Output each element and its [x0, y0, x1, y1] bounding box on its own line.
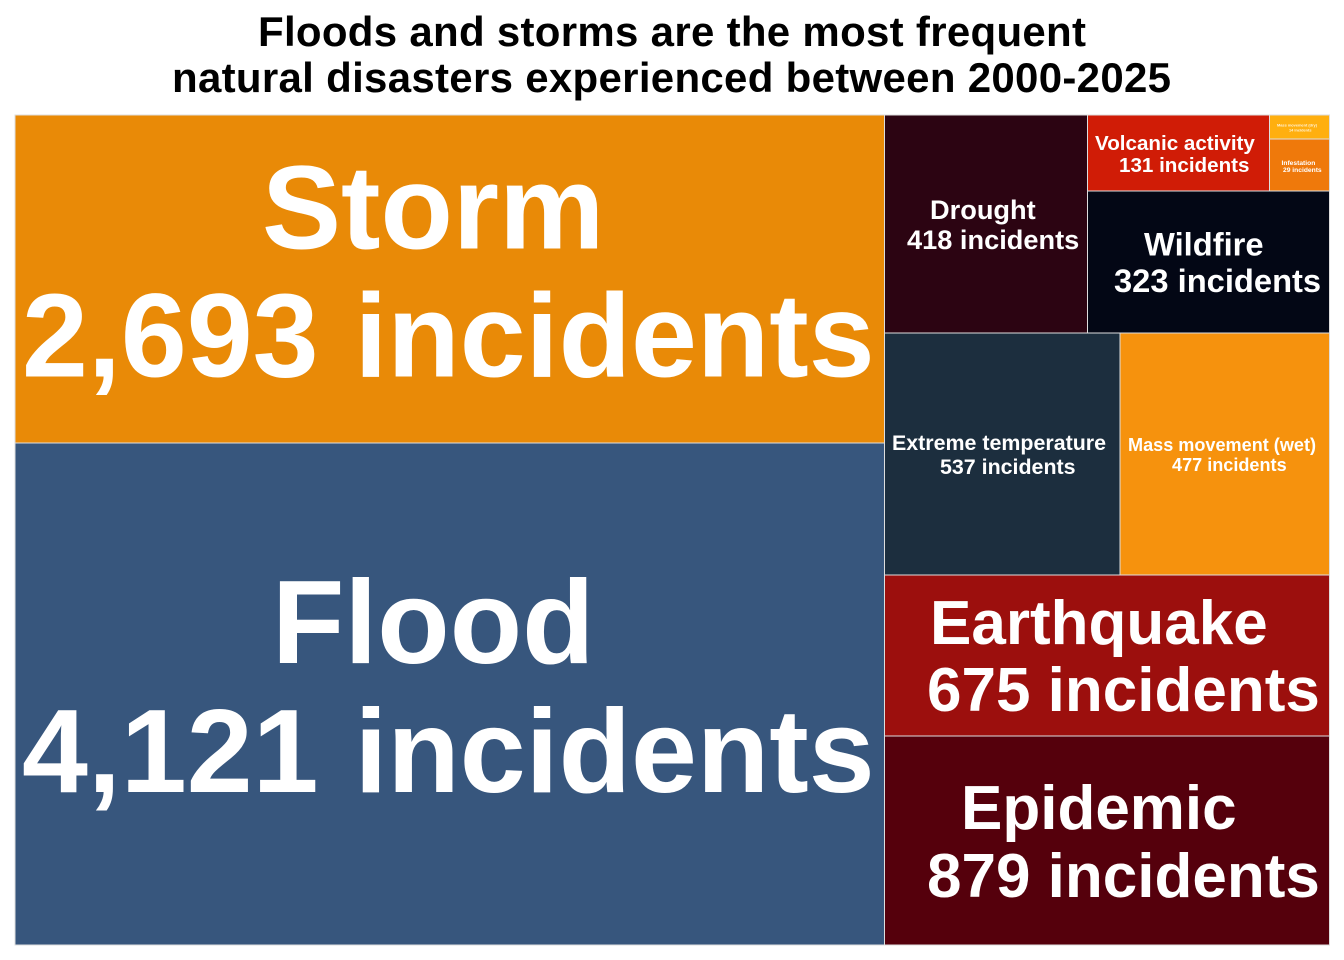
tile: Flood — [15, 443, 884, 945]
tile: Wildfire: 323 incidents — [1114, 262, 1321, 299]
title: natural disasters experienced between 2000-2025 — [172, 54, 1171, 101]
tile: Wildfire — [1088, 191, 1330, 333]
tile: Mass movement (wet): 477 incidents — [1172, 455, 1287, 475]
tile: Extreme temperature — [884, 333, 1120, 575]
tile: Drought: Drought — [930, 194, 1036, 225]
tile: Earthquake: 675 incidents — [927, 656, 1320, 725]
tile: Infestation — [1270, 139, 1330, 191]
tile: Volcanic activity — [1088, 115, 1270, 191]
title: Floods and storms are the most frequent — [258, 8, 1086, 55]
tile: Volcanic activity: Volcanic activity — [1095, 132, 1255, 155]
tile: Mass movement (wet) — [1120, 333, 1330, 575]
tile: Storm: Storm — [262, 142, 604, 274]
tile: Earthquake — [884, 575, 1330, 736]
tile: Storm — [15, 115, 884, 443]
tile: Drought — [884, 115, 1088, 333]
tile: Earthquake: Earthquake — [930, 589, 1268, 658]
tile: Epidemic: Epidemic — [961, 774, 1237, 843]
tile: Mass movement (dry) — [1270, 115, 1330, 139]
tile: Infestation: Infestation — [1282, 160, 1315, 167]
tile: Drought: 418 incidents — [907, 224, 1079, 255]
tile: Mass movement (dry): 14 incidents — [1289, 128, 1312, 132]
tile: Volcanic activity: 131 incidents — [1119, 154, 1249, 177]
tile: Epidemic — [884, 736, 1330, 945]
tile: Wildfire: Wildfire — [1144, 226, 1264, 262]
tile: Extreme temperature: Extreme temperature — [892, 431, 1106, 455]
tile: Infestation: 29 incidents — [1283, 167, 1322, 174]
tile: Epidemic: 879 incidents — [927, 842, 1320, 911]
tile: Flood: 4,121 incidents — [22, 686, 875, 818]
title — [172, 8, 1171, 101]
tile: Extreme temperature: 537 incidents — [940, 455, 1076, 479]
tile: Storm: 2,693 incidents — [22, 270, 875, 402]
tile: Mass movement (dry): Mass movement (dry) — [1277, 122, 1318, 128]
tile: Flood: Flood — [272, 557, 594, 689]
tile: Mass movement (wet): Mass movement (wet) — [1128, 435, 1316, 455]
